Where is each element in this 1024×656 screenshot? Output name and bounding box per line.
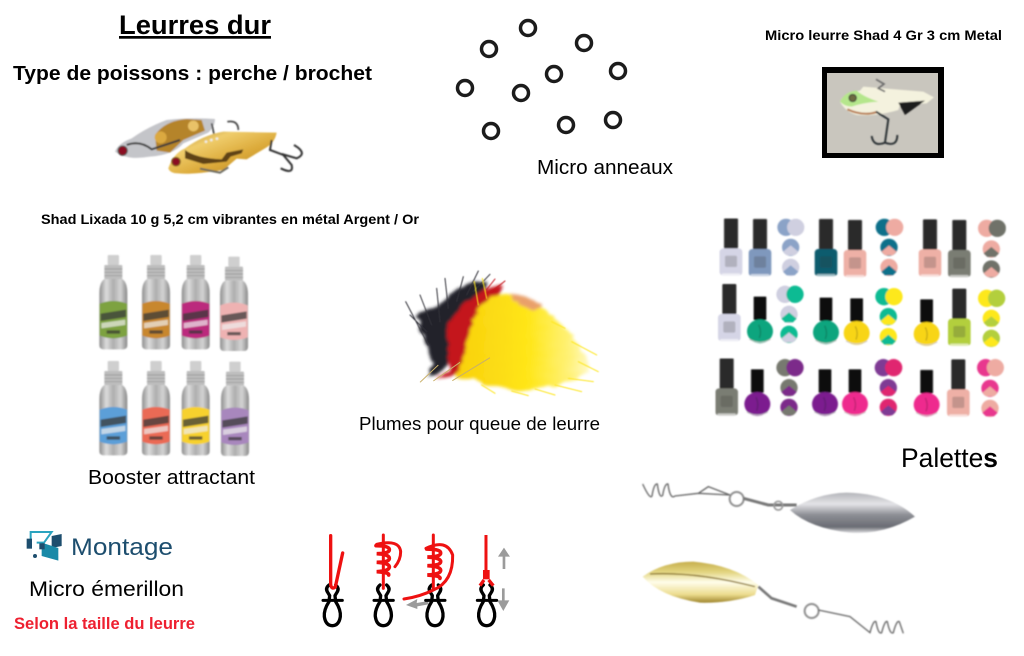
photo: palette of colour bottles (715, 218, 1006, 417)
silver blade with wire (643, 484, 915, 533)
label: micro rings: Micro anneaux (537, 157, 673, 179)
label: feathers: Plumes pour queue de leurre (359, 414, 600, 434)
label: micro swivel: Micro émerillon (29, 578, 184, 601)
row 2 bottles (718, 284, 971, 347)
label: booster: Booster attractant (88, 467, 255, 489)
swatches row 3 (776, 359, 1004, 417)
photo: booster spray bottles (99, 255, 249, 456)
caption: Shad Lixada: Shad Lixada 10 g 5,2 cm vibrantes en métal Argent / Or (41, 211, 420, 227)
feather fibres (406, 271, 598, 396)
red line step 1 (331, 536, 343, 588)
red line step 4 (480, 535, 493, 586)
row 1 bottles (720, 218, 971, 278)
photo: spinner blades (643, 484, 915, 633)
micro rings (458, 20, 626, 138)
diagram: knot tying steps (323, 535, 510, 626)
row 3 bottles (715, 358, 970, 417)
photo: micro lure in black frame (822, 67, 944, 158)
logo: Montage: Montage (71, 534, 173, 561)
gold blade with wire (643, 562, 903, 633)
photo: feathers (406, 271, 598, 396)
red line step 2 (376, 535, 401, 588)
note: lure size: Selon la taille du leurre (14, 615, 195, 633)
silver lure (115, 118, 238, 158)
arrows (406, 548, 510, 611)
swatches row 2 (776, 286, 1005, 347)
photo: Lixada metal lures (115, 118, 302, 174)
gold lure (168, 132, 302, 174)
snap swivels (323, 585, 497, 626)
logo: Montage (27, 532, 173, 561)
swatches row 1 (777, 219, 1006, 278)
subheading: fish types: Type de poissons : perche / brochet (13, 62, 372, 85)
label: palettes: Palettes (901, 443, 998, 473)
red line step 3 (404, 535, 453, 599)
title: Leurres dur (119, 10, 271, 40)
label: micro lure: Micro leurre Shad 4 Gr 3 cm Metal (765, 27, 1002, 43)
